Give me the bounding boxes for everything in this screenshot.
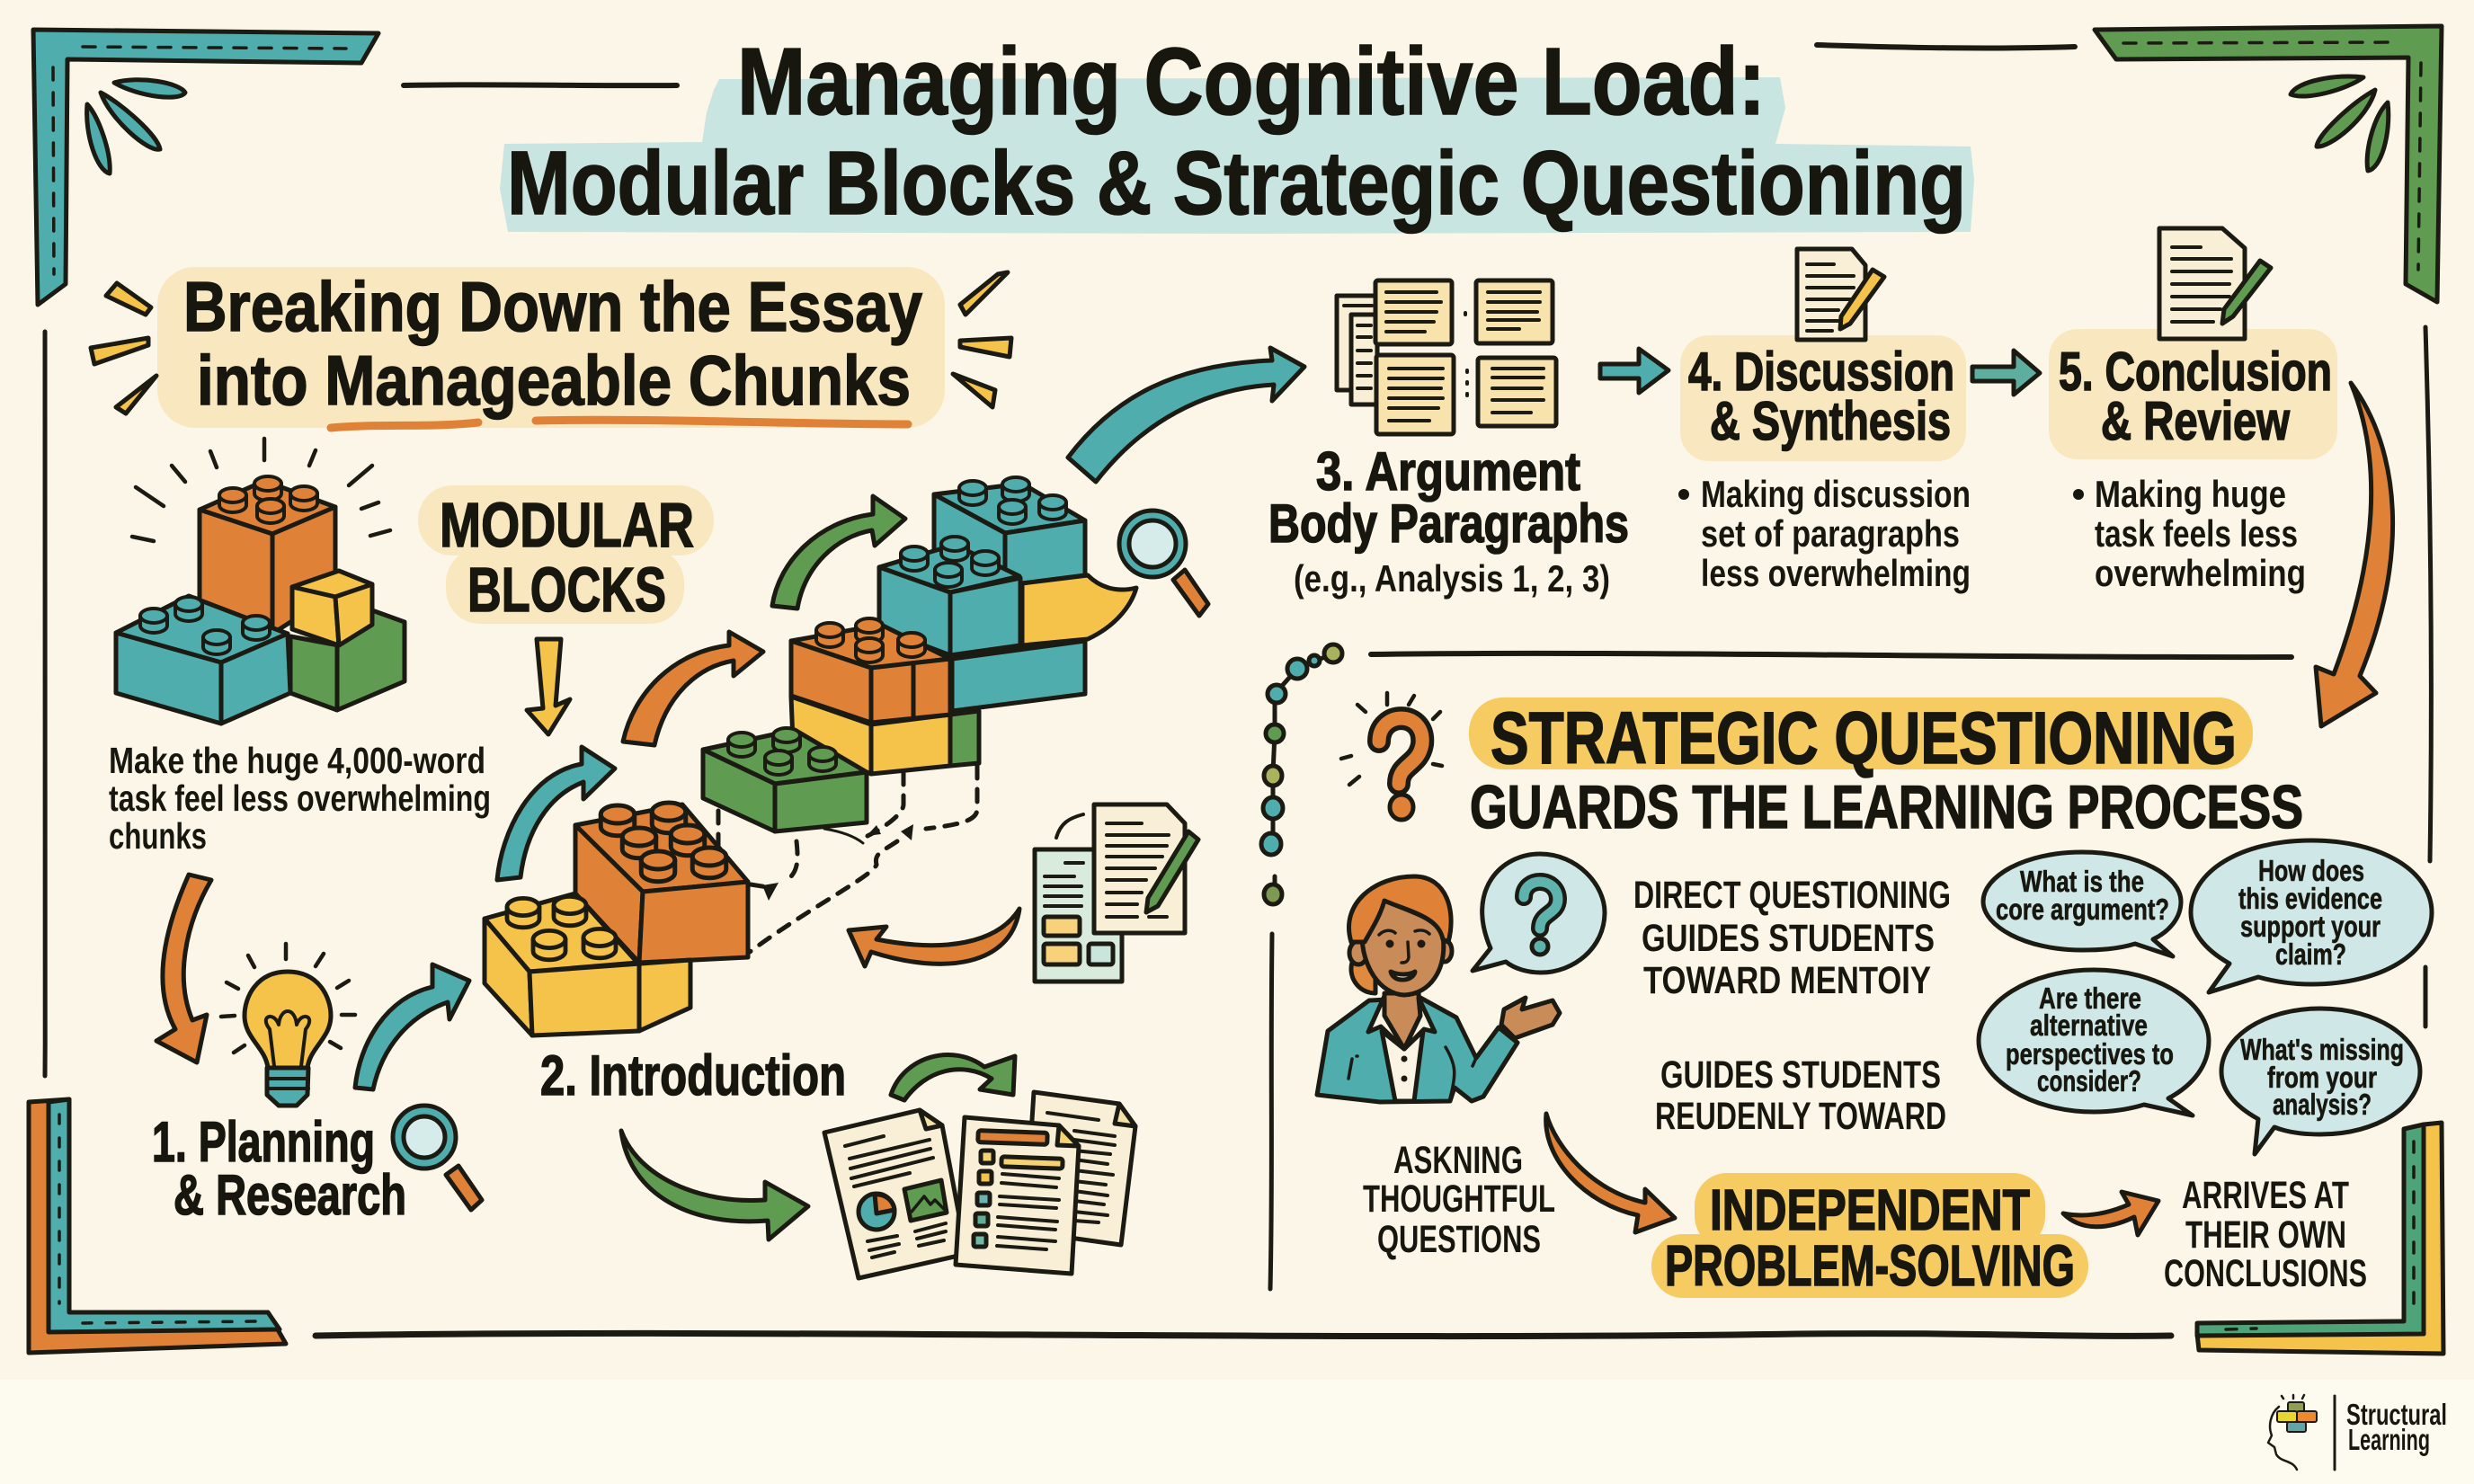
- corner: top left teal: [33, 30, 378, 305]
- bubble: evidence: support your: [2240, 910, 2381, 943]
- corner: bottom left orange and teal: [29, 1099, 286, 1353]
- icon: teacher speech bubble: [1473, 854, 1605, 973]
- text: step 5 bullet: [2073, 473, 2306, 594]
- title highlight: [500, 77, 1974, 234]
- text: step 3 argument body paragraphs: Body Paragraphs: [1268, 493, 1629, 554]
- icon: notes and pen: [1035, 804, 1198, 982]
- icon: document with green pen: [2159, 228, 2271, 339]
- arrow: orange return: [849, 909, 1019, 966]
- title: Managing Cognitive Load:: [737, 29, 1766, 135]
- decoration: bead chain: [1261, 644, 1342, 904]
- text: asking thoughtful questions: ASKNING: [1393, 1139, 1523, 1182]
- callout: independent problem-solving: [1651, 1173, 2088, 1298]
- arrow: yellow down: [527, 639, 570, 734]
- bubble: what's missing: from your: [2267, 1061, 2377, 1094]
- text: arrives at their own conclusions: [2164, 1174, 2367, 1295]
- logo: structural learning: Learning: [2348, 1423, 2430, 1456]
- bubble: alternative perspectives: consider?: [2037, 1064, 2141, 1097]
- text: make the huge task: chunks: [109, 815, 207, 857]
- arrow: big orange to strategic questioning: [2316, 383, 2393, 726]
- bubble: alternative perspectives: perspectives to: [2006, 1037, 2174, 1071]
- text: make the huge task: Make the huge 4,000-word: [109, 740, 485, 781]
- step 5 box: [2049, 329, 2337, 459]
- label: modular blocks: MODULAR: [440, 490, 694, 560]
- bubble: evidence: claim?: [2275, 937, 2346, 971]
- heading: breaking down the essay: Breaking Down the Essay: [183, 267, 922, 346]
- bubble: alternative perspectives: Are there: [2039, 982, 2141, 1015]
- text: asking thoughtful questions: [1363, 1139, 1555, 1261]
- text: asking thoughtful questions: QUESTIONS: [1377, 1218, 1541, 1261]
- bubble: evidence: [2191, 840, 2432, 992]
- arrow: small green curved: [891, 1054, 1015, 1100]
- text: make the huge task: [109, 740, 491, 857]
- text: make the huge task: task feel less overwhelming: [109, 778, 491, 819]
- text: direct questioning: [1633, 874, 1951, 1002]
- text: step 5 bullet: task feels less: [2095, 512, 2298, 555]
- icon: argument paragraph cards: [1337, 280, 1556, 434]
- bubble: evidence: this evidence: [2238, 882, 2382, 915]
- text: asking thoughtful questions: THOUGHTFUL: [1363, 1177, 1555, 1221]
- arrow: orange to conclusions: [2063, 1192, 2158, 1235]
- arrow: orange to independent problem-solving: [1546, 1114, 1675, 1232]
- text: step 4 bullet: less overwhelming: [1701, 552, 1971, 594]
- icon: document with yellow pencil: [1797, 249, 1884, 340]
- text: step 1 planning and research: & Research: [174, 1164, 406, 1227]
- step 4 box: [1680, 335, 1966, 461]
- step 5 box: 5. Conclusion: [2059, 342, 2332, 402]
- label: modular blocks: BLOCKS: [467, 555, 666, 625]
- text: step 1 planning and research: 1. Planning: [152, 1111, 375, 1174]
- step 5 box: & Review: [2101, 391, 2290, 451]
- icon: teacher: [1317, 876, 1560, 1102]
- bubble: what's missing: analysis?: [2273, 1088, 2372, 1121]
- heading: breaking down the essay: [157, 267, 945, 428]
- icon: magnifier lower: [393, 1106, 482, 1210]
- text: guides students: GUIDES STUDENTS: [1660, 1053, 1941, 1097]
- icon: magnifier upper: [1119, 511, 1208, 616]
- text: step 1 planning and research: [152, 1111, 406, 1227]
- text: arrives at their own conclusions: ARRIVES AT: [2182, 1174, 2349, 1217]
- icon: documents: [824, 1092, 1135, 1278]
- text: step 4 bullet: set of paragraphs: [1701, 512, 1960, 555]
- arrow: green to documents: [621, 1131, 808, 1240]
- arrow: teal from planning to introduction: [355, 964, 469, 1089]
- callout: independent problem-solving: INDEPENDENT: [1710, 1177, 2030, 1242]
- arrows: staircase curved arrows: [497, 348, 1304, 880]
- chart: staircase of lego blocks: [485, 477, 1136, 1035]
- bubble: core argument: core argument?: [1996, 893, 2169, 926]
- corner: bottom right yellow and green: [2197, 1123, 2443, 1354]
- bubble: what's missing: What's missing: [2240, 1033, 2404, 1066]
- arrow: orange down to planning: [156, 875, 211, 1062]
- bubble: core argument: What is the: [2020, 865, 2144, 898]
- corner: top right green: [2095, 26, 2442, 302]
- step 4 box: & Synthesis: [1710, 391, 1951, 451]
- bubble: alternative perspectives: alternative: [2030, 1009, 2148, 1042]
- text: step 2 introduction: 2. Introduction: [540, 1044, 846, 1107]
- callout: independent problem-solving: PROBLEM-SOLVING: [1665, 1233, 2075, 1298]
- text: arrives at their own conclusions: CONCLUSIONS: [2164, 1252, 2367, 1295]
- bubble: what's missing: [2221, 1009, 2420, 1154]
- heading: strategic questioning: STRATEGIC QUESTIONING: [1491, 698, 2237, 779]
- icon: orange question mark: [1341, 693, 1442, 820]
- text: step 5 bullet: Making huge: [2095, 473, 2286, 515]
- text: arrives at their own conclusions: THEIR OWN: [2185, 1213, 2346, 1257]
- title: [507, 29, 1966, 234]
- text: guides students: REUDENLY TOWARD: [1655, 1095, 1946, 1138]
- text: direct questioning: TOWARD MENTOIY: [1643, 959, 1931, 1002]
- logo: structural learning: [2268, 1395, 2447, 1470]
- heading: strategic questioning: [1469, 698, 2303, 841]
- text: step 4 bullet: [1678, 473, 1971, 594]
- text: step 3 argument body paragraphs: [1268, 441, 1629, 600]
- arrow: teal to step 5: [1972, 351, 2040, 395]
- icon: pile of modular blocks: [116, 439, 405, 724]
- bubble: alternative perspectives: [1979, 970, 2209, 1115]
- label: modular blocks: [418, 485, 714, 625]
- text: direct questioning: GUIDES STUDENTS: [1642, 917, 1935, 960]
- arrow: teal to step 4: [1600, 349, 1669, 393]
- text: step 5 bullet: overwhelming: [2095, 552, 2306, 594]
- text: direct questioning: DIRECT QUESTIONING: [1633, 874, 1951, 917]
- heading: breaking down the essay: into Manageable Chunks: [197, 341, 911, 420]
- icon: light bulb: [221, 944, 355, 1106]
- text: step 3 argument body paragraphs: 3. Argument: [1316, 441, 1580, 502]
- text: step 3 argument body paragraphs: (e.g., Analysis 1, 2, 3): [1294, 557, 1610, 600]
- title: Modular Blocks & Strategic Questioning: [507, 133, 1966, 234]
- text: guides students: [1655, 1053, 1946, 1138]
- step 4 box: 4. Discussion: [1688, 342, 1954, 402]
- bubble: core argument: [1983, 852, 2181, 956]
- text: step 4 bullet: Making discussion: [1701, 473, 1971, 515]
- bubble: evidence: How does: [2258, 854, 2364, 887]
- icon: yellow sparks around heading: [91, 272, 1011, 413]
